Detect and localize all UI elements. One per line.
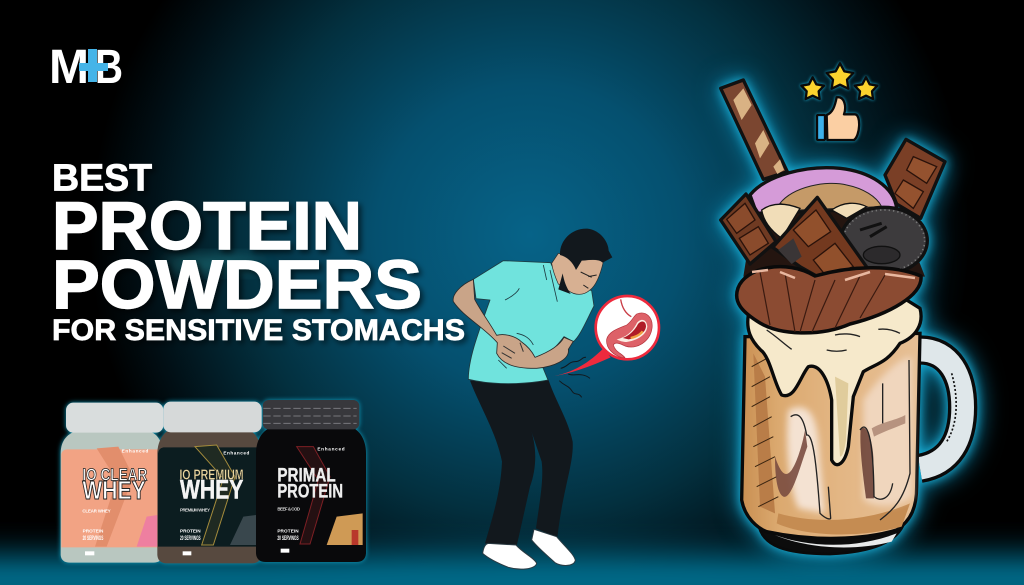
chocolate syrup swirl — [737, 267, 921, 333]
mug — [742, 333, 963, 554]
jar: IO Premium Whey: WHEY — [180, 475, 244, 505]
jar: IO Clear Whey: 20 SERVINGS — [83, 535, 104, 542]
icon: thumbs up — [817, 97, 859, 140]
wafer straw — [721, 80, 787, 179]
man with stomach ache — [453, 229, 659, 569]
jar: IO Premium Whey: Enhanced — [223, 451, 249, 456]
doughnut — [750, 168, 897, 238]
chocolate bar: centre — [773, 197, 868, 282]
jar: Primal Protein: BEEF & COD — [277, 507, 300, 512]
logo: M+B: B — [95, 41, 123, 94]
jar: Primal Protein: 20 SERVINGS — [277, 535, 299, 542]
logo: M+B — [49, 41, 123, 94]
melted cream — [748, 300, 921, 465]
jar: IO Clear Whey: Enhanced — [122, 448, 148, 453]
jar: IO Clear Whey — [61, 403, 163, 563]
jar: IO Premium Whey — [157, 402, 262, 563]
star: right — [855, 77, 877, 99]
jar: IO Clear Whey: PROTEIN — [83, 529, 104, 534]
jar: Primal Protein: PROTEIN — [277, 481, 343, 502]
star: left — [801, 77, 824, 99]
glass highlights — [787, 357, 913, 513]
shoes — [483, 529, 575, 569]
jar: IO Clear Whey: CLEAR WHEY — [82, 509, 111, 514]
jar: Primal Protein: PROTEIN — [277, 529, 299, 534]
arm and hand — [453, 279, 573, 368]
title: FOR SENSITIVE STOMACHS — [52, 314, 465, 347]
shirt — [468, 261, 594, 384]
title: POWDERS — [52, 246, 422, 323]
glass — [742, 333, 920, 538]
chocolate bar: back — [885, 139, 945, 218]
trousers — [470, 379, 573, 546]
beard — [558, 273, 571, 294]
star: centre — [827, 63, 853, 89]
title: PROTEIN — [52, 188, 362, 264]
title: BEST — [52, 158, 152, 200]
handle — [920, 350, 963, 468]
jar: Primal Protein: PRIMAL — [277, 466, 336, 487]
jar: IO Premium Whey: PREMIUM WHEY — [180, 508, 210, 513]
milkshake — [721, 80, 963, 554]
base — [758, 523, 904, 554]
oreo cookie — [841, 207, 927, 274]
filler behind toppings — [743, 203, 925, 277]
hair — [560, 229, 612, 270]
jar: Primal Protein: Enhanced — [317, 447, 345, 452]
jar: IO Premium Whey: 20 SERVINGS — [180, 535, 201, 542]
chocolate bar: left — [721, 194, 776, 264]
product jars — [61, 400, 366, 563]
rating: stars and thumbs up — [801, 63, 877, 140]
title — [52, 158, 465, 347]
jar: IO Clear Whey: IO CLEAR — [82, 465, 148, 485]
shirt creases — [498, 265, 557, 368]
jar: IO Premium Whey: IO PREMIUM — [179, 467, 244, 483]
jar: IO Clear Whey: WHEY — [82, 475, 146, 505]
neck and face — [552, 253, 603, 294]
stomach callout — [596, 296, 659, 359]
callout pointer — [550, 348, 611, 377]
jar: Primal Protein — [256, 400, 366, 562]
pain squiggles — [559, 357, 590, 397]
jar: IO Premium Whey: PROTEIN — [180, 529, 201, 534]
logo: M+B: M — [49, 41, 89, 94]
